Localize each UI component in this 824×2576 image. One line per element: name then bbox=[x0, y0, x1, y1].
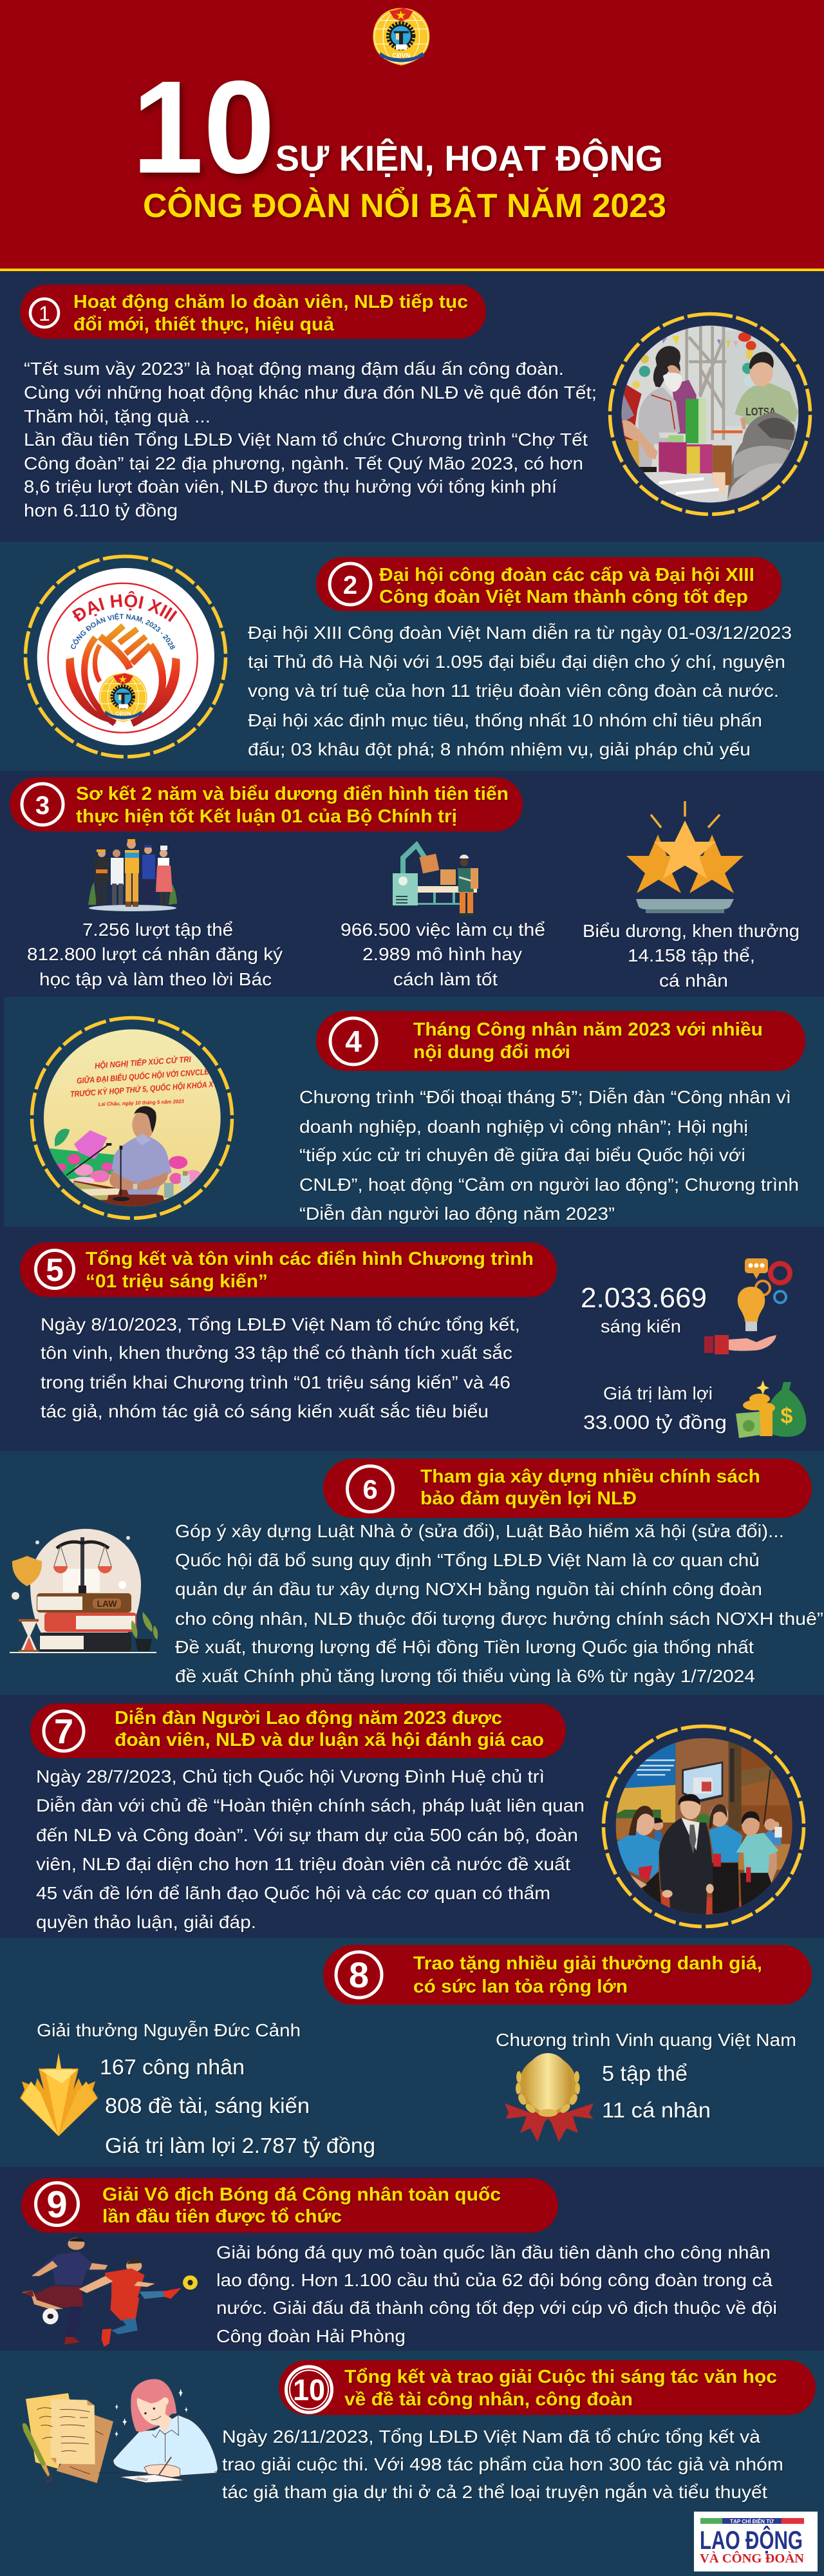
body text 2 bbox=[248, 623, 792, 759]
icon: robot arm and worker bbox=[393, 845, 478, 916]
body text 9: Giải bóng đá quy mô toàn quốc lần đầu tiên dành cho công nhân bbox=[216, 2242, 771, 2262]
heading pill 9: 9 bbox=[46, 2184, 68, 2226]
body text 2: đấu; 03 khâu đột phá; 8 nhóm nhiệm vụ, giải pháp chủ yếu bbox=[248, 739, 751, 759]
stat: value created: Giá trị làm lợi bbox=[603, 1383, 713, 1403]
photo: market stall in a dashed ring: LOTSA bbox=[745, 405, 776, 418]
heading pill 10: về đề tài công nhân, công đoàn bbox=[344, 2389, 633, 2410]
body text 6: Góp ý xây dựng Luật Nhà ở (sửa đổi), Luật Bảo hiểm xã hội (sửa đổi)... bbox=[175, 1521, 784, 1541]
icon: money bag and coins: $ bbox=[781, 1404, 793, 1428]
panel: section 9 bbox=[0, 2167, 824, 2351]
icon: writer with papers and pen bbox=[23, 2379, 232, 2483]
body text 9: nước. Giải đấu đã thành công tốt đẹp với cúp vô địch thuộc về đội bbox=[216, 2298, 777, 2318]
body text 7: quyền thảo luận, giải đáp. bbox=[36, 1912, 256, 1932]
panel: section 8 bbox=[0, 1938, 824, 2167]
logo: Lao Động và Công đoàn: VÀ CÔNG ĐOÀN bbox=[700, 2550, 805, 2566]
stat column 1 bbox=[27, 920, 283, 989]
stat: initiatives count: sáng kiến bbox=[601, 1316, 681, 1336]
body text 6: Quốc hội đã bổ sung quy định “Tổng LĐLĐ Việt Nam là cơ quan chủ bbox=[175, 1550, 760, 1570]
stat: initiatives count: 2.033.669 bbox=[581, 1282, 707, 1314]
award column: Nguyễn Đức Cảnh: 808 đề tài, sáng kiến bbox=[105, 2094, 310, 2117]
heading pill 2: 2 bbox=[343, 571, 357, 600]
body text 7: Ngày 28/7/2023, Chủ tịch Quốc hội Vương Đình Huệ chủ trì bbox=[36, 1766, 545, 1786]
panel: section 7 bbox=[30, 1703, 806, 1933]
award column: Vinh quang Việt Nam: 11 cá nhân bbox=[602, 2098, 711, 2122]
title line 2: CÔNG ĐOÀN NỔI BẬT NĂM 2023 bbox=[143, 187, 666, 225]
body text 5: tôn vinh, khen thưởng 33 tập thể có thành tích xuất sắc bbox=[41, 1343, 512, 1363]
heading pill 1: đổi mới, thiết thực, hiệu quả bbox=[73, 314, 335, 335]
icon: idea bulb and hand bbox=[704, 1258, 790, 1354]
stat column 1: 7.256 lượt tập thể bbox=[82, 920, 233, 940]
body text 5: tác giả, nhóm tác giả có sáng kiến xuất sắc tiêu biểu bbox=[41, 1401, 489, 1421]
photo: speaker at a voter meeting in a dashed ring: TRƯỚC KỲ HỌP THỨ 5, QUỐC HỘI KHÓA XV bbox=[70, 1079, 219, 1099]
body text 4: Chương trình “Đối thoại tháng 5”; Diễn đàn “Công nhân vì bbox=[299, 1087, 791, 1107]
body text 7: đến NLĐ và Công đoàn”. Với sự tham dự của 500 cán bộ, đoàn bbox=[36, 1825, 578, 1845]
photo: market stall in a dashed ring bbox=[605, 309, 818, 522]
body text 1: 8,6 triệu lượt đoàn viên, NLĐ được thụ hưởng với tổng kinh phí bbox=[24, 477, 557, 497]
heading pill 1: Hoạt động chăm lo đoàn viên, NLĐ tiếp tục bbox=[73, 292, 468, 312]
heading pill 9: Giải Vô địch Bóng đá Công nhân toàn quốc bbox=[102, 2184, 501, 2205]
title number 10: 10 bbox=[132, 53, 275, 201]
stat column 2: 966.500 việc làm cụ thể bbox=[341, 920, 545, 940]
heading pill 6: Tham gia xây dựng nhiều chính sách bbox=[420, 1466, 760, 1487]
body text 1: Thăm hỏi, tặng quà ... bbox=[24, 406, 211, 426]
icon: trade union emblem bbox=[373, 8, 429, 66]
body text 7: 45 vấn đề lớn để lãnh đạo Quốc hội và các cơ quan có thẩm bbox=[36, 1883, 550, 1903]
award column: Nguyễn Đức Cảnh: Giải thưởng Nguyễn Đức Cảnh bbox=[37, 2020, 301, 2040]
heading pill 2: Đại hội công đoàn các cấp và Đại hội XIII bbox=[379, 565, 754, 585]
heading pill 8 bbox=[323, 1945, 812, 2005]
logo: Lao Động và Công đoàn bbox=[694, 2512, 818, 2571]
heading pill 6: 6 bbox=[362, 1474, 378, 1504]
icon: trade union emblem: CĐVN bbox=[392, 53, 410, 60]
stat: value created: 33.000 tỷ đồng bbox=[583, 1411, 727, 1434]
heading pill 4 bbox=[316, 1011, 805, 1071]
award column: Nguyễn Đức Cảnh: 167 công nhân bbox=[100, 2055, 245, 2079]
heading pill 4: 4 bbox=[345, 1025, 362, 1058]
stat column 2: cách làm tốt bbox=[393, 969, 498, 989]
body text 4: CNLĐ”, hoạt động “Cảm ơn người lao động”; Chương trình bbox=[299, 1175, 799, 1195]
emblem: congress XIII logo in a dashed ring: ĐẠI HỘI XIII bbox=[72, 591, 178, 622]
award column: Vinh quang Việt Nam: 5 tập thể bbox=[602, 2061, 688, 2085]
body text 6 bbox=[175, 1521, 823, 1686]
heading pill 8: 8 bbox=[349, 1955, 369, 1995]
body text 1: Công đoàn” tại 22 địa phương, ngành. Tết Quý Mão 2023, có hơn bbox=[24, 453, 583, 473]
heading pill 8: có sức lan tỏa rộng lớn bbox=[413, 1976, 628, 1997]
icon: law books and scales bbox=[10, 1529, 158, 1653]
stat column 3: 14.158 tập thể, bbox=[628, 945, 755, 965]
panel: section 2 bbox=[0, 542, 824, 771]
panel: section 1 bbox=[20, 285, 812, 522]
heading pill 3: Sơ kết 2 năm và biểu dương điển hình tiên tiến bbox=[76, 784, 509, 804]
body text 6: quản dự án đầu tư xây dựng NƠXH bằng nguồn tài chính công đoàn bbox=[175, 1579, 762, 1599]
body text 7: viên, NLĐ đại diện cho hơn 11 triệu đoàn viên cả nước đề xuất bbox=[36, 1854, 570, 1874]
stat column 3: Biểu dương, khen thưởng bbox=[583, 921, 800, 941]
heading pill 5: Tổng kết và tôn vinh các điển hình Chương trình bbox=[86, 1249, 534, 1269]
heading pill 1 bbox=[20, 285, 486, 339]
heading pill 6 bbox=[323, 1459, 812, 1518]
body text 4: “Diễn đàn người lao động năm 2023” bbox=[299, 1204, 615, 1224]
stat column 1: học tập và làm theo lời Bác bbox=[39, 969, 272, 989]
award column: Vinh quang Việt Nam: Chương trình Vinh quang Việt Nam bbox=[496, 2030, 796, 2050]
heading pill 9 bbox=[21, 2178, 558, 2233]
heading pill 1: 1 bbox=[39, 302, 50, 325]
panel: section 10 bbox=[0, 2351, 824, 2576]
body text 6: cho công nhân, NLĐ thuộc đối tượng được hưởng chính sách NƠXH thuê” bbox=[175, 1609, 823, 1629]
stat: initiatives count bbox=[581, 1282, 707, 1336]
body text 1 bbox=[24, 359, 597, 520]
heading pill 7: 7 bbox=[54, 1712, 73, 1751]
body text 10 bbox=[222, 2427, 783, 2502]
body text 9 bbox=[216, 2242, 777, 2346]
icon: gold medal with ribbon bbox=[505, 2053, 594, 2142]
body text 2: tại Thủ đô Hà Nội với 1.095 đại biểu đại diện cho ý chí, nguyện bbox=[248, 652, 785, 672]
photo: speaker at a voter meeting in a dashed ring bbox=[26, 1011, 238, 1224]
body text 2: Đại hội xác định mục tiêu, thống nhất 10 nhóm chỉ tiêu phấn bbox=[248, 710, 762, 730]
heading pill 5 bbox=[20, 1242, 557, 1297]
body text 1: “Tết sum vầy 2023” là hoạt động mang đậm dấu ấn công đoàn. bbox=[24, 359, 564, 379]
heading pill 3: thực hiện tốt Kết luận 01 của Bộ Chính trị bbox=[76, 806, 457, 827]
heading pill 3: 3 bbox=[35, 791, 50, 820]
title line 1: SỰ KIỆN, HOẠT ĐỘNG bbox=[276, 138, 663, 178]
heading pill 5: “01 triệu sáng kiến” bbox=[86, 1271, 268, 1292]
icon: law books and scales: LAW bbox=[97, 1598, 117, 1609]
panel: section 3 bbox=[0, 771, 824, 997]
award column: Vinh quang Việt Nam bbox=[496, 2030, 796, 2142]
icon: gold star cluster bbox=[20, 2053, 98, 2136]
stat column 1: 812.800 lượt cá nhân đăng ký bbox=[27, 944, 283, 964]
stat column 2: 2.989 mô hình hay bbox=[362, 944, 522, 964]
heading pill 3 bbox=[10, 777, 523, 831]
stat column 3 bbox=[583, 921, 800, 990]
body text 10: tác giả tham gia dự thi ở cả 2 thể loại truyện ngắn và tiểu thuyết bbox=[222, 2482, 767, 2502]
body text 9: lao động. Hơn 1.100 cầu thủ của 62 đội bóng công đoàn trong cả bbox=[216, 2270, 772, 2290]
body text 5: trong triển khai Chương trình “01 triệu sáng kiến” và 46 bbox=[41, 1372, 510, 1392]
panel: section 6 bbox=[0, 1451, 824, 1695]
photo: speaker at a voter meeting in a dashed ring: Lai Châu, ngày 10 tháng 5 năm 2023 bbox=[98, 1099, 184, 1107]
body text 10: trao giải cuộc thi. Với 498 tác phẩm của hơn 300 tác giả và nhóm bbox=[222, 2454, 783, 2474]
body text 5 bbox=[41, 1314, 520, 1421]
photo: speaker at a voter meeting in a dashed ring: GIỮA ĐẠI BIỂU QUỐC HỘI VỚI CNVCLĐ bbox=[76, 1066, 210, 1086]
heading pill 10 bbox=[279, 2360, 816, 2415]
icon: group of workers bbox=[88, 839, 177, 911]
panel: section 5 bbox=[0, 1227, 824, 1451]
body text 4: “tiếp xúc cử tri chuyên đề giữa đại biểu Quốc hội với bbox=[299, 1145, 745, 1165]
heading pill 5: 5 bbox=[46, 1252, 64, 1288]
icon: money bag and coins bbox=[736, 1380, 806, 1438]
emblem: congress XIII logo in a dashed ring: CÔNG ĐOÀN VIỆT NAM, 2023 - 2028 bbox=[71, 613, 175, 649]
logo: Lao Động và Công đoàn: TẠP CHÍ ĐIỆN TỬ bbox=[730, 2519, 774, 2524]
body text 4 bbox=[299, 1087, 799, 1224]
stat: value created bbox=[583, 1383, 727, 1434]
body text 1: hơn 6.110 tỷ đồng bbox=[24, 500, 178, 520]
body text 2: Đại hội XIII Công đoàn Việt Nam diễn ra từ ngày 01-03/12/2023 bbox=[248, 623, 792, 643]
heading pill 6: bảo đảm quyền lợi NLĐ bbox=[420, 1488, 637, 1509]
heading pill 8: Trao tặng nhiều giải thưởng danh giá, bbox=[413, 1953, 762, 1974]
heading pill 2: Công đoàn Việt Nam thành công tốt đẹp bbox=[379, 587, 748, 607]
heading pill 7 bbox=[30, 1703, 566, 1758]
emblem: congress XIII logo in a dashed ring bbox=[23, 554, 228, 759]
header panel bbox=[0, 0, 824, 271]
award column: Nguyễn Đức Cảnh: Giá trị làm lợi 2.787 tỷ đồng bbox=[105, 2134, 375, 2157]
body text 9: Công đoàn Hải Phòng bbox=[216, 2326, 406, 2346]
heading pill 10: 10 bbox=[293, 2373, 325, 2407]
body text 5: Ngày 8/10/2023, Tổng LĐLĐ Việt Nam tổ chức tổng kết, bbox=[41, 1314, 520, 1334]
body text 7: Diễn đàn với chủ đề “Hoàn thiện chính sách, pháp luật liên quan bbox=[36, 1795, 585, 1815]
photo: forum group portrait in a dashed ring bbox=[599, 1719, 811, 1932]
body text 1: Lần đầu tiên Tổng LĐLĐ Việt Nam tổ chức Chương trình “Chợ Tết bbox=[24, 430, 588, 450]
heading pill 2 bbox=[316, 557, 782, 611]
award column: Nguyễn Đức Cảnh bbox=[20, 2020, 375, 2157]
icon: three stars on a tray bbox=[626, 801, 744, 913]
body text 4: doanh nghiệp, doanh nghiệp vì công nhân”; Hội nghị bbox=[299, 1117, 748, 1137]
heading pill 4: nội dung đổi mới bbox=[413, 1042, 570, 1063]
heading pill 7: đoàn viên, NLĐ và dư luận xã hội đánh giá cao bbox=[115, 1730, 544, 1750]
body text 10: Ngày 26/11/2023, Tổng LĐLĐ Việt Nam đã tổ chức tổng kết và bbox=[222, 2427, 760, 2447]
heading pill 7: Diễn đàn Người Lao động năm 2023 được bbox=[115, 1707, 502, 1728]
body text 6: Đề xuất, thương lượng để Hội đồng Tiền lương Quốc gia thống nhất bbox=[175, 1637, 754, 1657]
body text 7 bbox=[36, 1766, 585, 1932]
photo: speaker at a voter meeting in a dashed ring: HỘI NGHỊ TIẾP XÚC CỬ TRI bbox=[94, 1054, 192, 1070]
heading pill 4: Tháng Công nhân năm 2023 với nhiều bbox=[413, 1019, 763, 1040]
stat column 2 bbox=[341, 920, 545, 989]
heading pill 10: Tổng kết và trao giải Cuộc thi sáng tác văn học bbox=[344, 2367, 777, 2387]
body text 2: vọng và trí tuệ của hơn 11 triệu đoàn viên công đoàn cả nước. bbox=[248, 681, 779, 701]
icon: footballers bbox=[22, 2238, 198, 2347]
emblem: congress XIII logo in a dashed ring: CĐVN bbox=[115, 710, 131, 717]
heading pill 9: lần đầu tiên được tổ chức bbox=[102, 2206, 342, 2227]
body text 1: Cùng với những hoạt động khác như đưa đón NLĐ về quê đón Tết; bbox=[24, 383, 597, 402]
body text 6: đề xuất Chính phủ tăng lương tối thiểu vùng là 6% từ ngày 1/7/2024 bbox=[175, 1666, 755, 1686]
stat column 3: cá nhân bbox=[659, 971, 728, 990]
panel: section 4 bbox=[4, 997, 824, 1227]
